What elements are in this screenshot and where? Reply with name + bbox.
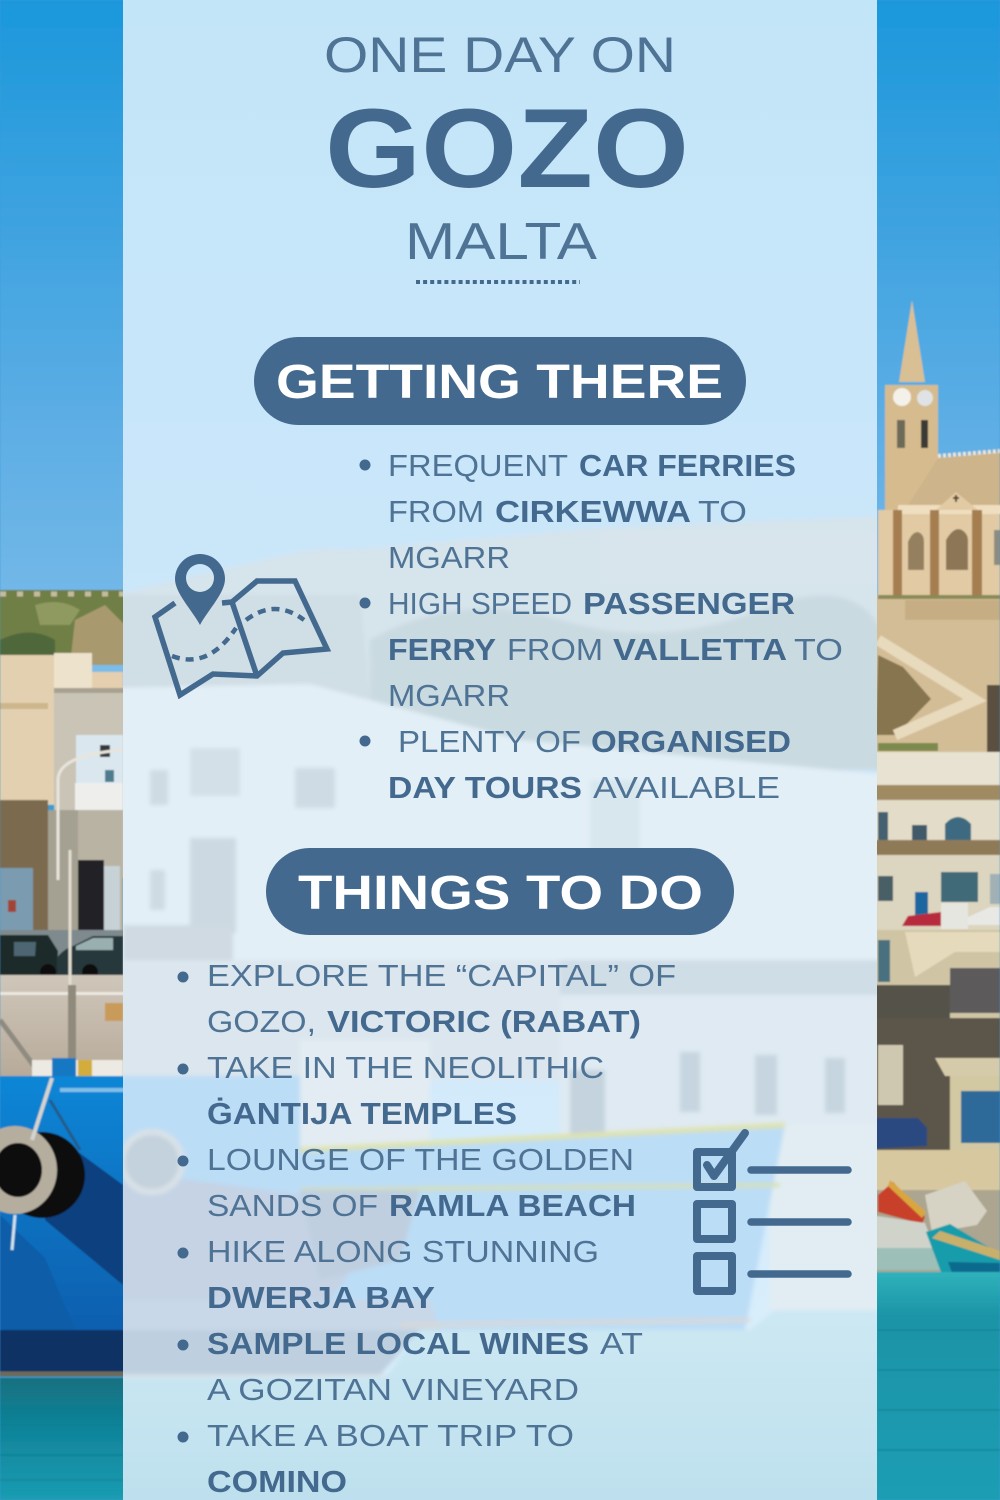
bullet: Ramla beach: SANDS OF bbox=[207, 1188, 378, 1223]
quay road bbox=[0, 975, 130, 1080]
bullet: passenger ferry: VALLETTA bbox=[613, 632, 787, 667]
bullet: Dwerja bay bbox=[178, 1234, 599, 1315]
luzzu boats bbox=[870, 1180, 1000, 1280]
bullet: car ferries: CIRKEWWA bbox=[495, 494, 691, 529]
faded white buildings bbox=[115, 684, 885, 960]
heading pill: things to do: THINGS TO DO bbox=[298, 867, 703, 920]
list: things to do bbox=[178, 958, 676, 1499]
faded water bbox=[115, 1310, 885, 1500]
bullet: car ferries bbox=[360, 448, 796, 575]
title: Gozo: GOZO bbox=[325, 86, 689, 211]
bullet: passenger ferry: PASSENGER bbox=[583, 586, 795, 621]
bullet: temples bbox=[178, 1050, 604, 1131]
faded quay and buildings bbox=[115, 960, 560, 1080]
bullet: passenger ferry bbox=[360, 586, 843, 713]
faded boat hull bbox=[115, 1076, 785, 1330]
sky bbox=[0, 0, 1000, 760]
bullet: day tours: PLENTY OF bbox=[398, 724, 581, 759]
bullet: passenger ferry: TO bbox=[794, 632, 843, 667]
water bbox=[0, 1378, 130, 1500]
faded hull bottom band bbox=[115, 1330, 420, 1375]
hillside with castle wall bbox=[0, 590, 130, 665]
title line: one day on: ONE DAY ON bbox=[324, 27, 676, 83]
bullet: day tours bbox=[360, 724, 791, 805]
left harbour buildings bbox=[0, 653, 134, 936]
heading pill: getting there: GETTING THERE bbox=[276, 356, 723, 409]
right terraced buildings bbox=[870, 752, 1000, 1150]
translucent central panel over the harbour photo bbox=[115, 0, 885, 1500]
bullet: temples: ĠANTIJA TEMPLES bbox=[207, 1096, 517, 1131]
bullet: Comino bbox=[178, 1418, 574, 1499]
title line: Malta: MALTA bbox=[405, 213, 597, 271]
bullet: Ramla beach bbox=[178, 1142, 636, 1223]
icon: checklist bbox=[697, 1133, 848, 1291]
bullet: car ferries: TO bbox=[698, 494, 747, 529]
bullet: Victoria: EXPLORE THE “CAPITAL” OF bbox=[207, 958, 676, 993]
faded tyre bbox=[122, 1132, 182, 1192]
bullet: local wines bbox=[178, 1326, 643, 1407]
heading pill: getting there bbox=[254, 337, 746, 425]
bullet: Dwerja bay: HIKE ALONG STUNNING bbox=[207, 1234, 599, 1269]
title block bbox=[324, 27, 689, 282]
sea ripples bbox=[0, 1330, 1000, 1480]
bullet: local wines: AT bbox=[600, 1326, 643, 1361]
bullet: Comino: TAKE A BOAT TRIP TO bbox=[207, 1418, 574, 1453]
bullet: Victoria: GOZO, bbox=[207, 1004, 316, 1039]
bullet: Victoria bbox=[178, 958, 676, 1039]
water, right bbox=[870, 1272, 1000, 1500]
bullet: car ferries: MGARR bbox=[388, 540, 510, 575]
bullet: Comino: COMINO bbox=[207, 1464, 347, 1499]
faded quay right bbox=[770, 1125, 885, 1310]
background photo: right strip with church bbox=[870, 300, 1000, 755]
heading pill: things to do bbox=[266, 848, 734, 935]
list: getting there bbox=[360, 448, 843, 805]
bullet: car ferries: FREQUENT bbox=[388, 448, 568, 483]
bullet: day tours: ORGANISED bbox=[591, 724, 791, 759]
bullet: passenger ferry: FERRY bbox=[388, 632, 496, 667]
bullet: local wines: A GOZITAN VINEYARD bbox=[207, 1372, 579, 1407]
icon: map with location pin bbox=[155, 554, 327, 695]
bullet: day tours: AVAILABLE bbox=[593, 770, 780, 805]
bullet: day tours: DAY TOURS bbox=[388, 770, 582, 805]
bullet: local wines: SAMPLE LOCAL WINES bbox=[207, 1326, 589, 1361]
bullet: Ramla beach: LOUNGE OF THE GOLDEN bbox=[207, 1142, 634, 1177]
bullet: passenger ferry: FROM bbox=[507, 632, 603, 667]
lamp post and mast bbox=[0, 750, 123, 1085]
bullet: temples: TAKE IN THE NEOLITHIC bbox=[207, 1050, 604, 1085]
bullet: car ferries: FROM bbox=[388, 494, 484, 529]
bullet: Ramla beach: RAMLA BEACH bbox=[389, 1188, 636, 1223]
faded hillside bbox=[115, 516, 885, 770]
dotted underline bbox=[416, 280, 580, 284]
concrete quay bbox=[870, 1150, 1000, 1192]
bullet: car ferries: CAR FERRIES bbox=[579, 448, 796, 483]
parked cars bbox=[0, 930, 130, 980]
blue fishing boat bbox=[0, 1076, 130, 1375]
bullet: Victoria: VICTORIC (RABAT) bbox=[327, 1004, 641, 1039]
bullet: passenger ferry: HIGH SPEED bbox=[388, 586, 572, 621]
bullet: Dwerja bay: DWERJA BAY bbox=[207, 1280, 435, 1315]
bullet: passenger ferry: MGARR bbox=[388, 678, 510, 713]
